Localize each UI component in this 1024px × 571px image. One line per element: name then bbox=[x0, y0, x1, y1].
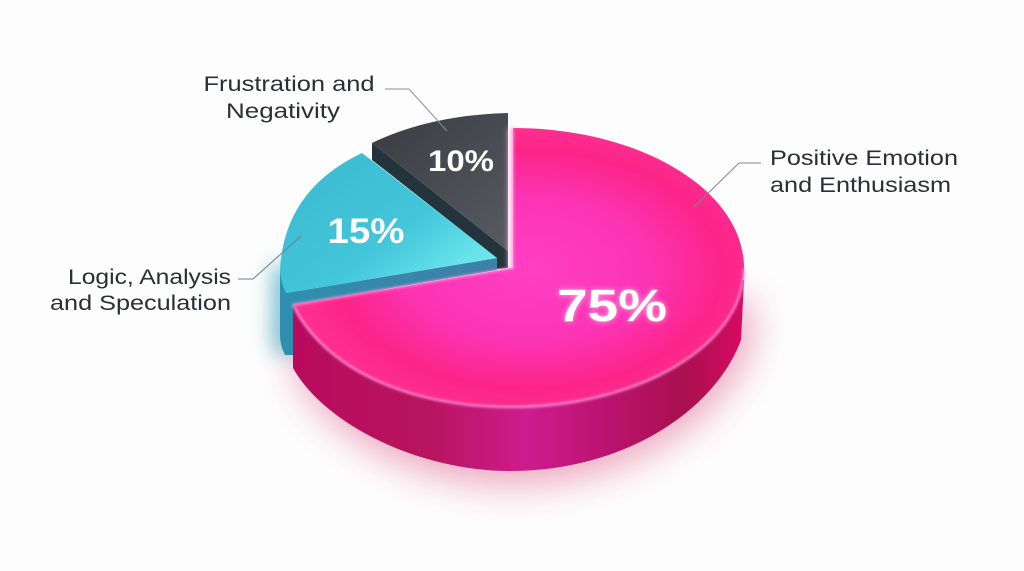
label: logic analysis and speculation: and Speculation bbox=[50, 291, 231, 315]
label: positive emotion and enthusiasm: and Enthusiasm bbox=[770, 173, 951, 197]
leader: logic bbox=[238, 236, 301, 279]
value: 75%: 75% bbox=[557, 280, 667, 331]
slice: positive 75% bbox=[293, 128, 744, 471]
label: frustration and negativity bbox=[204, 72, 374, 123]
value: 10%: 10% bbox=[428, 145, 494, 178]
label: logic analysis and speculation: Logic, Analysis bbox=[68, 265, 231, 289]
label: logic analysis and speculation bbox=[50, 265, 231, 315]
label: positive emotion and enthusiasm bbox=[770, 146, 958, 197]
slice: logic 15% bbox=[280, 153, 497, 355]
label: positive emotion and enthusiasm: Positive Emotion bbox=[770, 146, 958, 170]
label: frustration and negativity: Negativity bbox=[226, 99, 340, 123]
pie chart bbox=[280, 113, 744, 471]
cyan shadow glow bbox=[272, 265, 296, 358]
leader: positive bbox=[694, 163, 761, 207]
leader: frustration bbox=[385, 89, 447, 131]
pink shadow glow bbox=[295, 300, 752, 486]
slice: frustration 10% bbox=[372, 113, 508, 269]
value: 15%: 15% bbox=[328, 212, 404, 251]
value: 75%: 75% bbox=[557, 280, 667, 331]
label: frustration and negativity: Frustration and bbox=[204, 72, 374, 96]
